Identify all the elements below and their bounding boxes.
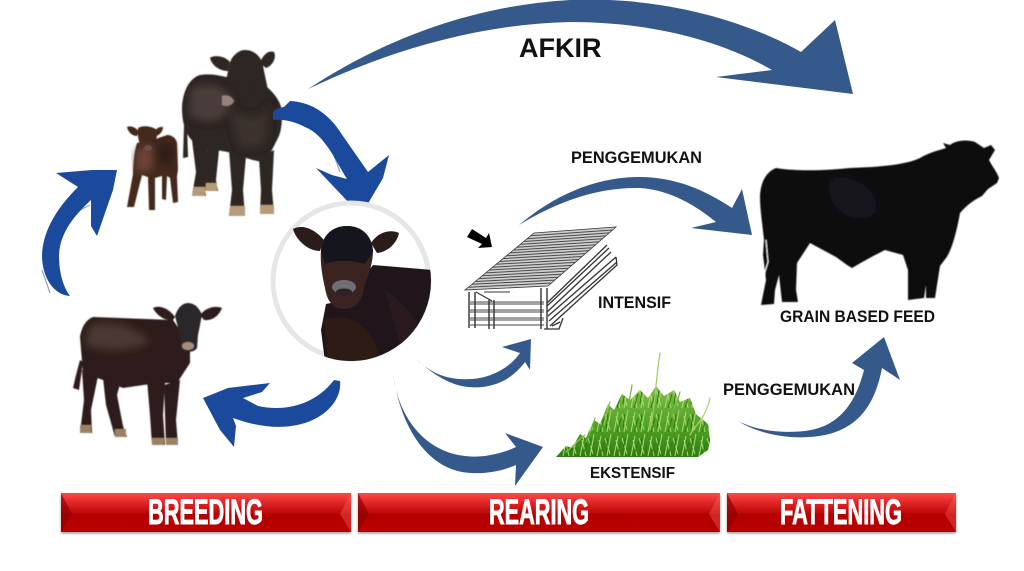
ring: [273, 203, 429, 359]
calf body: [321, 265, 432, 370]
label: ekstensif: EKSTENSIF: [590, 465, 675, 482]
small pointer arrow: [467, 229, 492, 248]
grass mound: [556, 386, 710, 457]
label: penggemukan lower: PENGGEMUKAN: [723, 380, 855, 399]
cow: mother: [182, 50, 282, 216]
arrow: to ekstensif: [393, 373, 543, 486]
banner: breeding: [61, 493, 351, 532]
barn fence front: [469, 288, 547, 329]
banner: fattening: FATTENING: [780, 493, 902, 532]
banner: breeding: BREEDING: [148, 493, 263, 532]
arrow: brush to rearing calf: [273, 101, 389, 212]
barn illustration: [465, 227, 617, 329]
barn roof: [465, 227, 616, 290]
cow: fattened bull: [760, 141, 999, 305]
arrow: afkir: [308, 0, 853, 94]
arrow: penggemukan ekstensif to grain feed: [738, 337, 900, 437]
calf ears: [293, 227, 399, 253]
arrow: brush to heifer: [203, 380, 340, 447]
label: grain based feed: GRAIN BASED FEED: [780, 307, 935, 326]
grass blades: [566, 353, 710, 452]
calf head: [321, 226, 373, 309]
label: afkir: AFKIR: [519, 33, 602, 63]
cow: calf: [127, 126, 178, 210]
label: intensif: INTENSIF: [598, 293, 671, 312]
calf portrait in circle: [273, 203, 432, 370]
arrow: penggemukan intensif to grain feed: [519, 177, 752, 235]
grass: [556, 353, 710, 457]
arrow: brush to calf and mother: [42, 170, 117, 296]
arrow: to intensif: [415, 339, 531, 387]
banner: rearing: [358, 493, 720, 532]
barn fence side: [544, 245, 617, 329]
banner: rearing: REARING: [489, 493, 589, 532]
cow: young heifer: [73, 303, 222, 445]
label: penggemukan upper: PENGGEMUKAN: [571, 148, 702, 167]
